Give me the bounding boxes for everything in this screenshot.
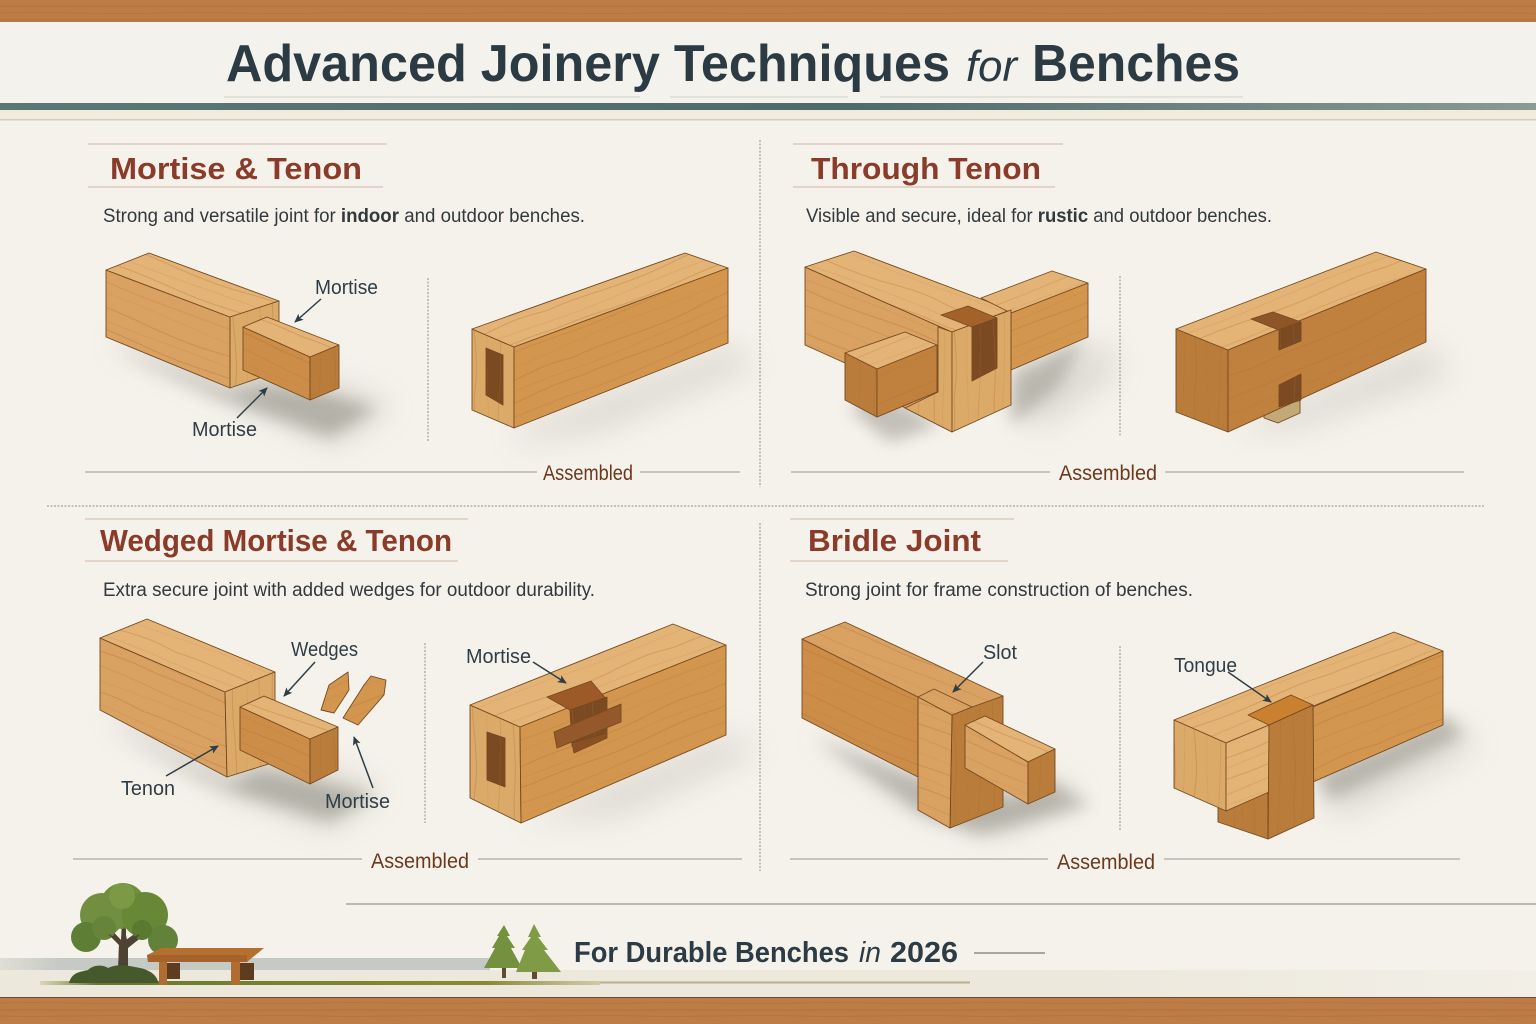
- icon: tree: [71, 883, 178, 972]
- panel: Mortise & Tenon: [85, 144, 755, 485]
- panel: Wedged Mortise & Tenon: [73, 519, 760, 873]
- label: Slot: Slot: [983, 642, 1017, 664]
- heading: Mortise & Tenon: [88, 144, 387, 187]
- icon: wedge 1: [321, 672, 349, 713]
- icon: wedge 2: [343, 676, 386, 725]
- joint: assembled through tenon: [1176, 252, 1450, 432]
- joint: assembled mortise and tenon: [472, 253, 755, 442]
- title: [224, 35, 1243, 97]
- title: Benches: [1032, 35, 1240, 93]
- joint: exploded bridle joint: [802, 622, 1090, 835]
- label: Mortise lower: [325, 737, 390, 813]
- heading: Wedged Mortise & Tenon: Wedged Mortise & Tenon: [100, 523, 452, 558]
- title: Advanced Joinery Techniques: [226, 35, 950, 93]
- assembled label: Assembled: [371, 850, 469, 873]
- heading: Mortise & Tenon: Mortise & Tenon: [110, 151, 362, 186]
- heading: Through Tenon: [793, 144, 1063, 187]
- footer tagline: in: [859, 937, 881, 969]
- description: Strong and versatile joint for indoor and outdoor benches.: [103, 206, 585, 227]
- label: Wedges: [284, 639, 358, 696]
- footer tagline: For Durable Benches: [574, 937, 849, 969]
- label: Mortise bottom: [192, 388, 267, 441]
- joint: assembled wedged mortise and tenon: [470, 624, 760, 823]
- assembled label: Assembled: [1057, 851, 1155, 874]
- joint: exploded wedged mortise and tenon: [100, 619, 386, 830]
- label: Tenon: Tenon: [121, 778, 175, 800]
- joint: exploded through tenon: [805, 251, 1120, 442]
- footer scene: [0, 883, 1536, 998]
- heading: Through Tenon: Through Tenon: [811, 151, 1041, 186]
- panel: Through Tenon: [791, 144, 1464, 485]
- label: Wedges: Wedges: [291, 639, 358, 661]
- description: Visible and secure, ideal for rustic and outdoor benches.: [806, 206, 1272, 227]
- label: Tenon: [121, 746, 218, 800]
- assembled label: Assembled: [543, 462, 633, 485]
- heading: Bridle Joint: Bridle Joint: [808, 523, 981, 558]
- title: for: [966, 42, 1019, 91]
- label: Tongue: [1174, 655, 1271, 702]
- label: Mortise top: [295, 277, 378, 322]
- top wood bar: [0, 0, 1536, 22]
- header band: [0, 23, 1536, 120]
- heading: Bridle Joint: [790, 519, 1014, 561]
- description: Extra secure joint with added wedges for outdoor durability.: [103, 580, 595, 601]
- label: Tongue: Tongue: [1174, 655, 1237, 677]
- icon: pine trees: [484, 924, 561, 979]
- panel: Bridle Joint: [790, 519, 1480, 874]
- label: Slot: [953, 642, 1017, 692]
- joint: exploded mortise and tenon: [105, 253, 395, 445]
- icon: bench: [147, 948, 264, 985]
- label: Mortise lower: Mortise: [325, 791, 390, 813]
- label: Mortise top: Mortise: [315, 277, 378, 299]
- icon: bush: [69, 965, 158, 983]
- footer tagline: 2026: [890, 937, 958, 969]
- assembled label: Assembled: [1059, 462, 1157, 485]
- footer tagline: [574, 937, 1045, 969]
- ground: [40, 981, 600, 985]
- horizon band: [0, 958, 490, 970]
- description: Strong joint for frame construction of benches.: [805, 580, 1193, 601]
- label: Mortise bottom: Mortise: [192, 419, 257, 441]
- joint: assembled bridle joint: [1174, 632, 1480, 839]
- label: Mortise upper: Mortise: [466, 646, 531, 668]
- label: Mortise upper: [466, 646, 566, 683]
- bottom wood bar: [0, 997, 1536, 1024]
